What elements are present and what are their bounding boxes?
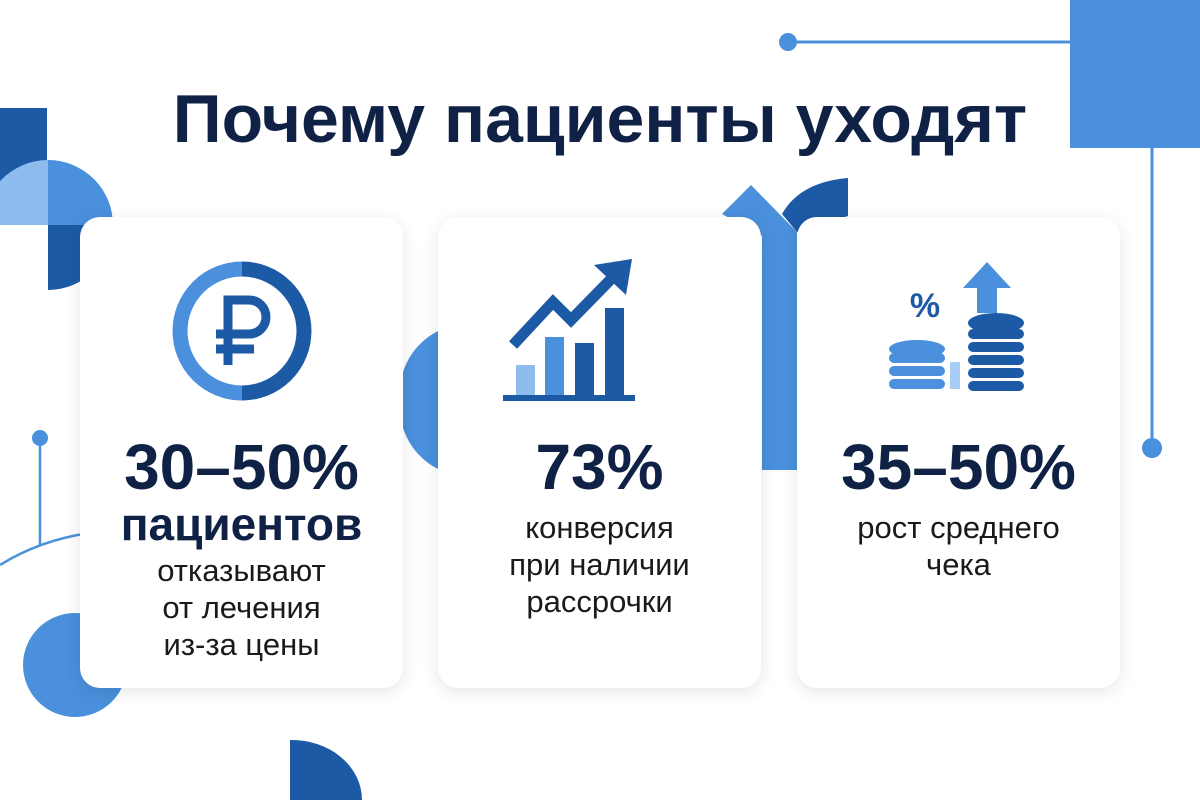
title: Почему пациенты уходят (173, 81, 1027, 157)
desc 2 (509, 510, 690, 619)
icon: coins with percent: % (910, 287, 940, 325)
desc 3 (857, 510, 1060, 582)
desc 2: конверсия (525, 510, 674, 545)
desc 3: рост среднего (857, 510, 1060, 545)
desc 3: чека (926, 547, 991, 582)
card 3 (797, 217, 1120, 688)
desc 1 (157, 553, 326, 662)
stat 2: 73% (535, 431, 664, 503)
desc 2: рассрочки (526, 584, 673, 619)
icon: coins with percent (889, 262, 1024, 391)
icon: ruble coin (172, 262, 312, 400)
label 1: пациентов (121, 498, 362, 550)
desc 2: при наличии (509, 547, 690, 582)
stat 3: 35–50% (841, 431, 1076, 503)
desc 1: из-за цены (164, 627, 319, 662)
desc 1: отказывают (157, 553, 326, 588)
icon: growth chart (503, 259, 635, 401)
card 2 (438, 217, 761, 688)
stat 1: 30–50% (124, 431, 359, 503)
card 1 (80, 217, 403, 688)
desc 1: от лечения (162, 590, 321, 625)
